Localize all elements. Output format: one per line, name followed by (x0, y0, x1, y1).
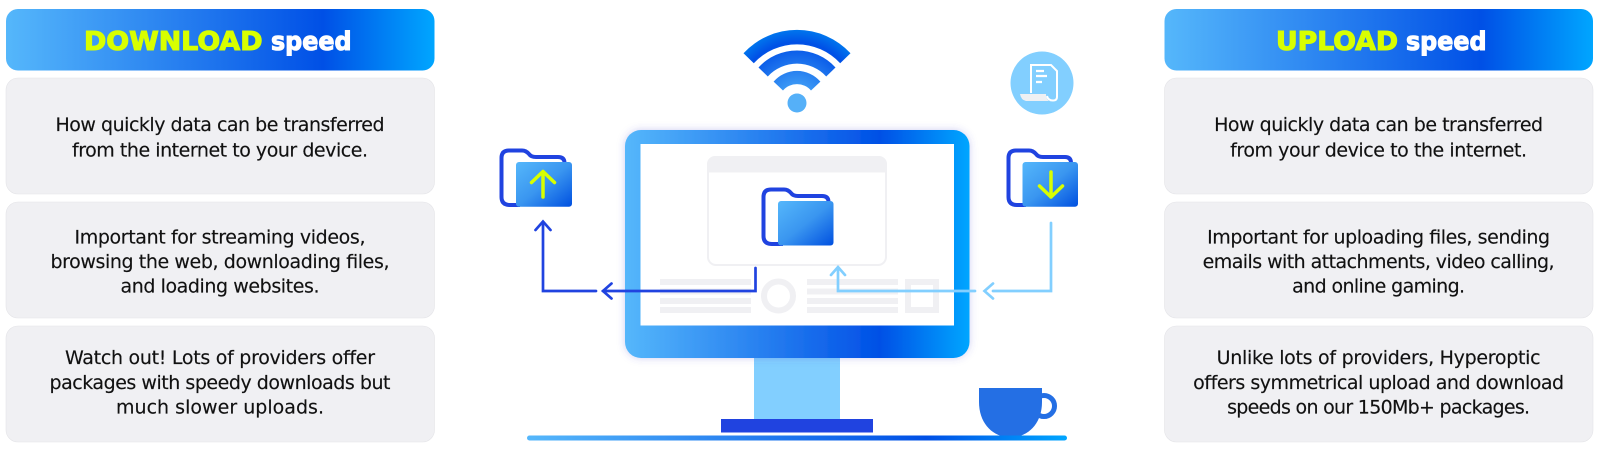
card: symmetrical speeds (1164, 326, 1593, 442)
card: upload uses: and online gaming. (1292, 276, 1465, 298)
card: upload uses (1164, 202, 1593, 318)
card: symmetrical speeds: speeds on our 150Mb+ packages. (1227, 396, 1530, 418)
monitor screen (640, 144, 954, 326)
window (707, 156, 887, 265)
icon: wifi (744, 30, 850, 113)
monitor frame (625, 130, 970, 358)
heading: upload speed (1164, 9, 1593, 70)
card: download warning: much slower uploads. (116, 396, 324, 418)
card: download uses: browsing the web, downloading files, (50, 251, 390, 273)
icon: coffee cup (979, 388, 1054, 437)
desk line (527, 436, 1067, 440)
arrow: data to upload folder (536, 222, 756, 298)
card: download uses: Important for streaming videos, (74, 226, 366, 248)
arrow: data from download folder (831, 223, 1051, 298)
panel: download speed (6, 9, 434, 442)
heading: download speed: speed (271, 27, 352, 57)
icon: download folder (1008, 150, 1078, 207)
card: upload definition: from your device to the internet. (1230, 140, 1527, 162)
card: upload definition: How quickly data can be transferred (1214, 114, 1543, 136)
heading: upload speed: UPLOAD (1276, 27, 1398, 57)
heading: download speed: DOWNLOAD (84, 27, 262, 57)
icon: document (1010, 52, 1074, 114)
card: download warning: Watch out! Lots of providers offer (65, 347, 375, 369)
card: download uses (6, 202, 434, 318)
card: download definition: How quickly data can be transferred (56, 114, 384, 136)
card: upload uses: Important for uploading files, sending (1207, 226, 1550, 248)
card: download warning: packages with speedy downloads but (50, 372, 390, 394)
icon: centre folder (764, 190, 834, 246)
panel: upload speed (1164, 9, 1593, 442)
card: download uses: and loading websites. (120, 276, 320, 298)
screen content placeholders (660, 279, 936, 313)
card: symmetrical speeds: Unlike lots of providers, Hyperoptic (1217, 347, 1541, 369)
monitor stand (754, 358, 840, 420)
card: upload definition (1164, 78, 1593, 194)
card: download definition (6, 78, 434, 194)
card: download warning (6, 326, 434, 442)
heading: download speed (6, 9, 434, 70)
card: download definition: from the internet to your device. (72, 140, 368, 162)
icon: upload folder (502, 150, 572, 207)
heading: upload speed: speed (1406, 27, 1486, 57)
card: upload uses: emails with attachments, video calling, (1203, 251, 1555, 273)
monitor base (721, 419, 873, 432)
card: symmetrical speeds: offers symmetrical upload and download (1193, 372, 1564, 394)
monitor (625, 130, 970, 432)
